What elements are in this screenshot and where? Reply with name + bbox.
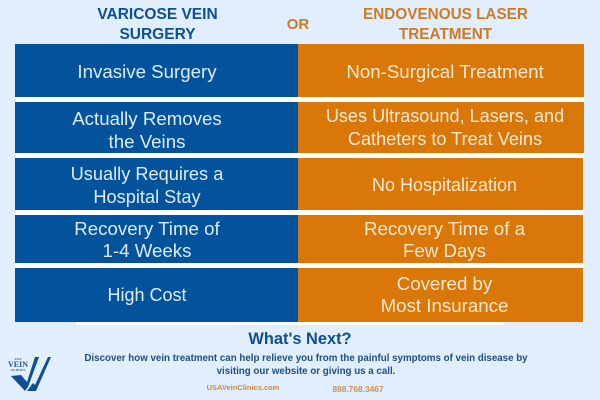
website link text: USAVeinClinics.com [207, 383, 279, 392]
heading: or: OR [287, 16, 309, 33]
row 3 left: usually requires a hospital stay: Hospital Stay [93, 186, 201, 206]
heading: what's next: What's Next? [248, 330, 352, 348]
row 4 left: recovery time of 1-4 weeks: 1-4 Weeks [102, 240, 191, 261]
row 2 left: actually removes the veins: Actually Removes [72, 108, 222, 129]
row 2 left: actually removes the veins: the Veins [109, 130, 185, 152]
logo check mark [11, 357, 51, 391]
text block: discover how vein treatment can help: visiting our website or giving us a call. [217, 366, 395, 376]
row 1 left: invasive surgery [15, 44, 298, 97]
heading: endovenous laser treatment [363, 6, 528, 43]
row 2 right: uses ultrasound, lasers and catheters: Uses Ultrasound, Lasers, and [326, 106, 564, 126]
row 3 right: no hospitalization: No Hospitalization [372, 175, 517, 195]
heading: varicose vein surgery: VARICOSE VEIN [97, 6, 218, 23]
row 3 left: usually requires a hospital stay: Usually Requires a [71, 164, 223, 184]
text block: discover how vein treatment can help: Discover how vein treatment can help relieve you from the painful symptoms of vein disease by [84, 353, 528, 364]
row 5 left: high cost [15, 268, 298, 322]
white bottom strip [76, 322, 504, 325]
row 2 left: actually removes the veins [15, 102, 298, 153]
logo wordmark: USA [14, 357, 22, 361]
row 4 left: recovery time of 1-4 weeks [15, 215, 298, 263]
phone number: 888.768.3467 [332, 384, 384, 394]
row 4 right: recovery time of a few days [298, 215, 583, 263]
row 5 right: covered by most insurance: Most Insurance [381, 295, 508, 316]
row 5 right: covered by most insurance [298, 268, 583, 322]
logo wordmark: VEIN [8, 360, 28, 369]
row 2 right: uses ultrasound, lasers and catheters [298, 102, 584, 153]
row 3 right: no hospitalization [298, 158, 583, 210]
row 4 right: recovery time of a few days: Recovery Time of a [364, 218, 525, 238]
text block: discover how vein treatment can help [84, 353, 528, 376]
row 3 left: usually requires a hospital stay [15, 158, 298, 210]
row 5 right: covered by most insurance: Covered by [397, 272, 492, 294]
heading: endovenous laser treatment: ENDOVENOUS LASER [363, 6, 528, 23]
logo wordmark [8, 357, 28, 372]
heading: endovenous laser treatment: TREATMENT [399, 26, 492, 43]
row 4 left: recovery time of 1-4 weeks: Recovery Time of [74, 218, 220, 238]
icon: usa vein clinics logo [8, 357, 51, 391]
heading: varicose vein surgery: SURGERY [119, 26, 196, 43]
logo wordmark: CLINICS [11, 368, 25, 372]
row 1 right: non-surgical treatment: Non-Surgical Treatment [346, 61, 544, 82]
row 1 right: non-surgical treatment [298, 44, 584, 97]
row 1 left: invasive surgery: Invasive Surgery [77, 61, 217, 82]
row 4 right: recovery time of a few days: Few Days [403, 240, 486, 261]
comparison table background [15, 44, 584, 322]
row 5 left: high cost: High Cost [107, 285, 187, 305]
row 2 right: uses ultrasound, lasers and catheters: Catheters to Treat Veins [348, 128, 542, 148]
heading: varicose vein surgery [97, 6, 218, 43]
